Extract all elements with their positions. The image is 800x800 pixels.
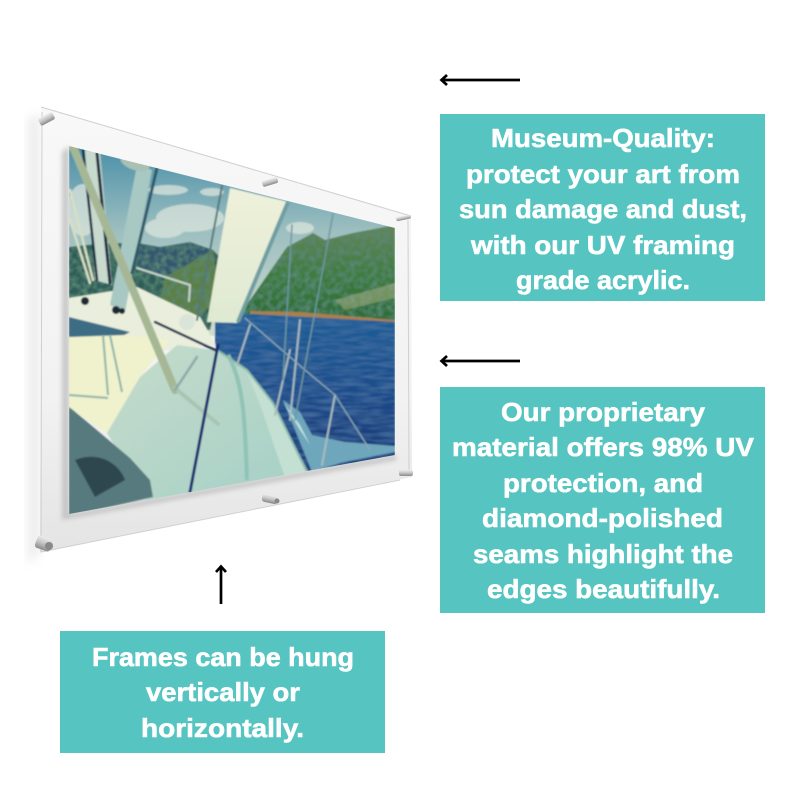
blue gap (69, 316, 130, 338)
standoff: top middle (261, 177, 279, 187)
callout text: Museum-Quality: (491, 123, 715, 153)
callout text: Frames can be hung (92, 642, 354, 672)
shoreline (250, 311, 395, 323)
callout text: edges beautifully. (487, 574, 720, 604)
arrow: top left-pointing (442, 75, 520, 85)
callout text: with our UV framing (470, 230, 735, 260)
callout text: diamond-polished (482, 503, 723, 533)
callout text: vertically or (146, 677, 300, 707)
callout: hanging orientation (60, 631, 385, 753)
acrylic panel (40, 107, 412, 552)
left hills (69, 242, 225, 330)
standoff: bottom middle (261, 493, 280, 505)
acrylic wall frame with photo (28, 107, 413, 565)
arrow: middle left-pointing (442, 356, 520, 366)
cream deck (69, 335, 170, 433)
right hills (235, 225, 395, 322)
railing (237, 320, 335, 465)
sky (69, 146, 395, 336)
callout text: sun damage and dust, (459, 194, 747, 224)
mast (110, 165, 152, 312)
photo: sailboat (67, 146, 395, 516)
cabin top (69, 287, 216, 352)
clouds (67, 184, 314, 238)
standoff: top right (396, 214, 411, 221)
callout text (92, 642, 354, 743)
boom (73, 147, 175, 390)
callout text: protect your art from (466, 159, 740, 189)
arrow: up-pointing (216, 566, 226, 604)
callout text (452, 397, 755, 604)
photo shadow (62, 146, 397, 520)
callout text: protection, and (503, 468, 703, 498)
callout text: seams highlight the (473, 539, 733, 569)
dark stay (190, 345, 218, 492)
callout text: Our proprietary (501, 397, 706, 427)
callout: museum quality (440, 114, 765, 301)
water (215, 312, 395, 475)
wall shadow (28, 112, 40, 565)
callout text: material offers 98% UV (452, 432, 755, 462)
wake foam (283, 400, 395, 472)
hull (107, 345, 310, 505)
sail (207, 188, 288, 323)
winches (81, 297, 125, 314)
standoff: bottom right (399, 470, 413, 476)
rigging lines (70, 147, 370, 492)
callout text: grade acrylic. (516, 265, 690, 295)
standoff: bottom left (34, 535, 54, 552)
callout text (459, 123, 747, 295)
callout: UV protection (440, 387, 765, 613)
acrylic edge lines (41, 107, 411, 552)
callout text: horizontally. (141, 713, 304, 743)
standoff: top left (38, 112, 55, 126)
cloth bundle (69, 407, 153, 516)
